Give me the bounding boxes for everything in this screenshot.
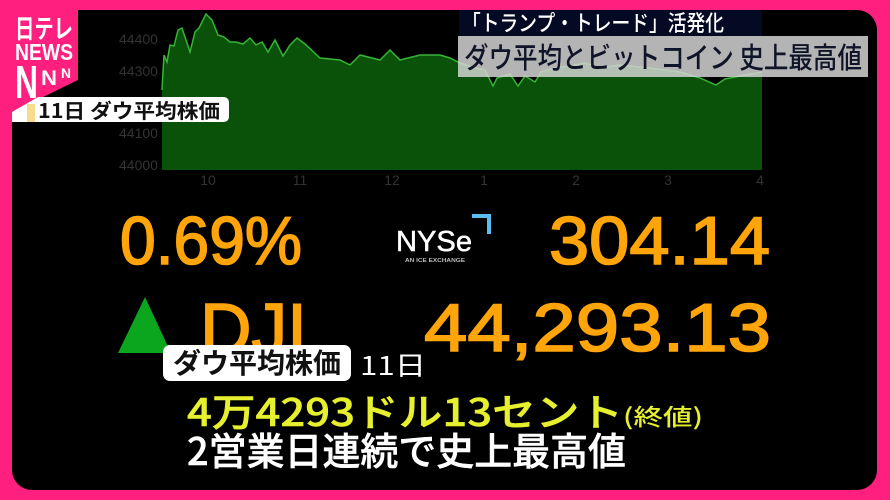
caption record high: 2営業日連続で史上最高値 bbox=[187, 421, 626, 476]
y axis labels: 44000 bbox=[119, 157, 158, 173]
x axis labels bbox=[200, 172, 764, 188]
caption date: 11日 bbox=[360, 346, 426, 383]
NYSE logo: NYSe bbox=[396, 226, 472, 258]
logo: Nippon TV NEWS NNN: N bbox=[61, 65, 71, 81]
ticker DJI: DJI bbox=[200, 290, 307, 370]
date tag: 11日 ダウ平均株価 bbox=[38, 95, 220, 124]
stat: percent change: 0.69% bbox=[120, 203, 302, 279]
x axis labels: 1 bbox=[480, 172, 488, 188]
logo: Nippon TV NEWS NNN: N bbox=[15, 56, 38, 108]
stat: index value: 44,293.13 bbox=[424, 290, 771, 366]
x axis labels: 4 bbox=[756, 172, 764, 188]
y axis labels: 44400 bbox=[119, 31, 158, 47]
line chart: Dow intraday bbox=[119, 14, 764, 188]
y axis labels bbox=[119, 31, 158, 173]
logo: Nippon TV NEWS NNN: 日テレ bbox=[15, 14, 73, 44]
x axis labels: 2 bbox=[572, 172, 580, 188]
x axis labels: 11 bbox=[293, 172, 307, 188]
x axis labels: 3 bbox=[664, 172, 672, 188]
NYSE logo: AN ICE EXCHANGE bbox=[405, 258, 465, 264]
NYSE logo bbox=[396, 216, 489, 264]
caption closing price: 4万4293ドル13セント bbox=[187, 382, 623, 437]
logo: Nippon TV NEWS NNN bbox=[0, 0, 78, 112]
up triangle bbox=[118, 297, 171, 353]
stat: points change: 304.14 bbox=[549, 203, 770, 279]
y axis labels: 44100 bbox=[119, 125, 158, 141]
y axis labels: 44300 bbox=[119, 63, 158, 79]
headline top strip: 「トランプ・トレード」活発化 bbox=[462, 6, 724, 38]
logo: Nippon TV NEWS NNN: N bbox=[41, 67, 57, 90]
x axis labels: 12 bbox=[384, 172, 400, 188]
logo: Nippon TV NEWS NNN: NEWS bbox=[15, 39, 73, 65]
caption closing price: (終値) bbox=[623, 398, 703, 432]
caption label: ダウ平均株価 bbox=[173, 342, 341, 382]
x axis labels: 10 bbox=[200, 172, 216, 188]
